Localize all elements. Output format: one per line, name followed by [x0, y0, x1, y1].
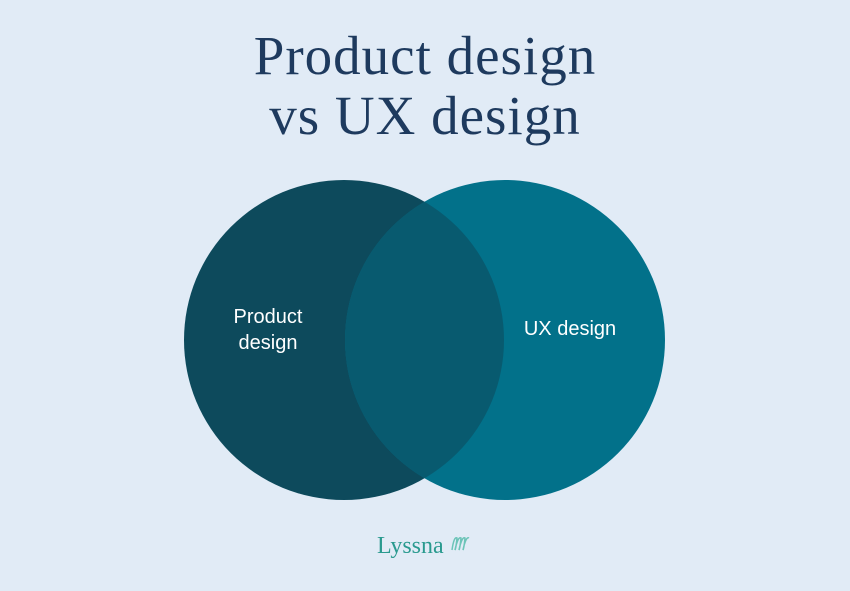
circle: product design	[184, 180, 504, 500]
overlap	[345, 202, 504, 478]
circle: UX design	[345, 180, 665, 500]
logo: Lyssna	[377, 533, 444, 559]
title: vs UX design	[269, 85, 581, 146]
circle: UX design: UX design	[524, 318, 616, 340]
title	[254, 25, 596, 146]
circle: product design: design	[239, 332, 297, 354]
title: Product design	[254, 25, 596, 86]
circle: product design: Product	[234, 306, 303, 328]
venn diagram	[184, 180, 665, 558]
